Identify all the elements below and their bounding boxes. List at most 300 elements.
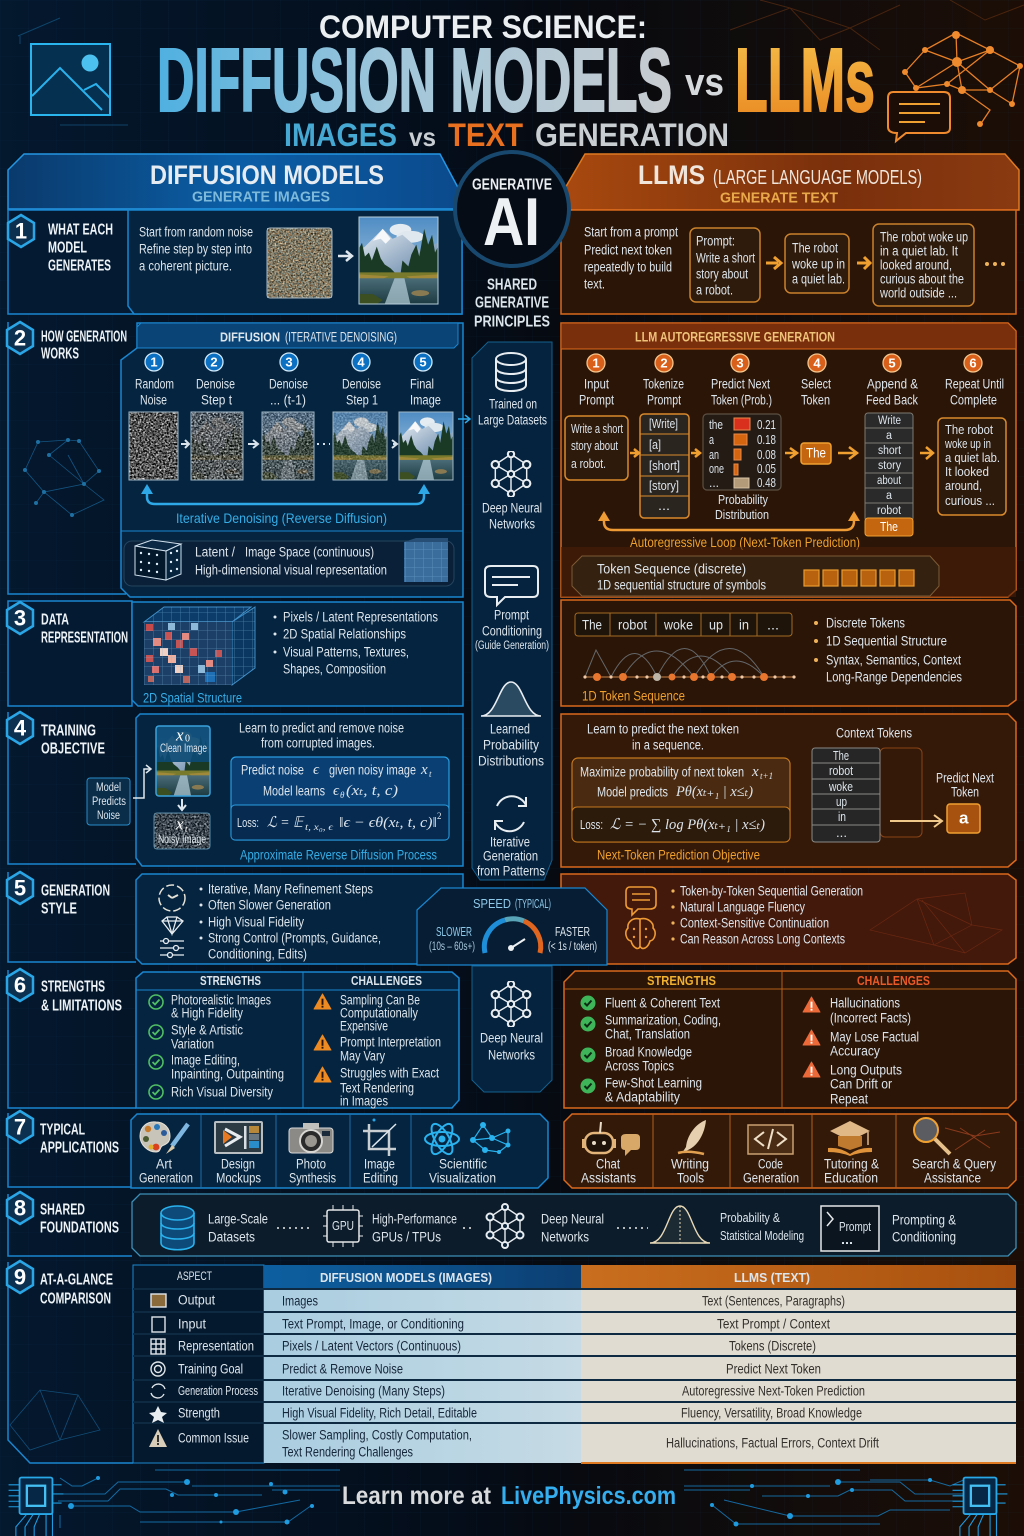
step labels: Denoise — [342, 376, 381, 392]
generative ai badge: GENERATIVE — [472, 176, 552, 194]
label — [41, 722, 105, 758]
label: WORKS — [41, 346, 79, 362]
diffusion header band: DIFFUSION — [220, 330, 280, 344]
principle: neural networks: Deep Neural — [482, 500, 542, 516]
context tokens stack: The — [833, 749, 849, 763]
description — [139, 224, 253, 274]
probability chart: ... — [709, 476, 719, 490]
foundation: gpu: GPUs / TPUs — [372, 1230, 441, 1244]
step labels: Repeat Until — [945, 376, 1004, 392]
app: writing tools — [671, 1120, 709, 1186]
heading: diffusion models: GENERATE IMAGES — [192, 188, 330, 206]
decorative network — [23, 438, 104, 517]
output box 1: woke up in — [791, 256, 845, 272]
token sequence panel — [561, 547, 1016, 597]
formula box: t+1 — [760, 771, 773, 781]
header: LLMS (TEXT) — [734, 1271, 810, 1285]
noisy image card: t — [185, 824, 188, 834]
dots — [985, 262, 1005, 266]
table header — [136, 972, 459, 1108]
output box 1 — [785, 234, 849, 293]
app: code generation — [743, 1125, 799, 1186]
probability chart: an — [709, 448, 719, 462]
appended token stack — [865, 413, 913, 536]
icon: prompt bubble — [485, 566, 538, 605]
icon: brain — [626, 919, 655, 948]
step labels: Image — [410, 392, 441, 408]
reverse diffusion arrow — [141, 484, 430, 504]
foundation: prompting: ... — [841, 1233, 853, 1247]
step labels: Final — [410, 376, 434, 392]
gauge — [484, 919, 541, 953]
bullets: High Visual Fidelity — [208, 914, 304, 930]
description: a coherent picture. — [139, 258, 232, 274]
label — [40, 1272, 113, 1308]
bullets — [200, 882, 381, 962]
step numbers — [587, 354, 982, 372]
latent text — [195, 544, 387, 578]
icon: cycle — [495, 796, 526, 831]
description: Predict next token — [584, 242, 672, 258]
decorative network — [10, 1390, 100, 1450]
challenges list — [803, 996, 919, 1106]
latent text: High-dimensional visual representation — [195, 562, 387, 578]
strengths list: Variation — [171, 1036, 214, 1052]
probability chart: a — [709, 433, 714, 447]
app: design mockups: Design — [221, 1156, 255, 1172]
table header: CHALLENGES — [351, 974, 422, 988]
bullets: Pixels / Latent Representations — [283, 610, 438, 624]
diffusion header band — [137, 323, 458, 348]
decorative network: top — [18, 0, 1024, 125]
bullets: 1D Sequential Structure — [826, 634, 947, 648]
token list: ... — [658, 499, 670, 513]
chart caption: Distribution — [715, 508, 769, 522]
right section 5: generation style — [561, 874, 1016, 964]
step labels: Prompt — [579, 392, 614, 408]
token row: woke — [663, 618, 693, 632]
app: design mockups: Mockups — [216, 1170, 261, 1186]
context tokens stack — [812, 748, 922, 842]
context tokens stack: robot — [829, 764, 853, 778]
table header: CHALLENGES — [857, 974, 930, 988]
icon: database — [496, 353, 526, 391]
strengths list — [580, 996, 721, 1104]
speed title: SPEED — [473, 897, 511, 911]
principle: datasets: Large Datasets — [478, 412, 547, 428]
app: scientific visualization: Visualization — [429, 1170, 496, 1186]
faster label — [548, 925, 597, 953]
step labels: Denoise — [269, 376, 308, 392]
step numbers: 4 — [357, 354, 365, 370]
strengths list: Chat, Translation — [605, 1026, 690, 1042]
label: Deep Neural — [480, 1030, 543, 1046]
badge 4 — [7, 712, 33, 744]
landscape image — [359, 217, 438, 304]
foundation: prompting: Prompting & — [892, 1212, 956, 1228]
principle: prompt conditioning: (Guide Generation) — [475, 640, 549, 652]
header: ASPECT — [177, 1271, 212, 1283]
app: photo synthesis: Synthesis — [289, 1170, 336, 1186]
label: HOW GENERATION — [41, 328, 127, 346]
center shared network panel — [472, 966, 552, 1092]
app: art generation: Art — [156, 1156, 172, 1172]
right section 1: prompt to text — [561, 210, 1016, 314]
left section 2: how generation works — [7, 322, 470, 597]
diffusion column: Slower Sampling, Costly Computation, — [282, 1428, 472, 1442]
foundation: neural networks: Deep Neural — [541, 1212, 604, 1226]
principle: iterative generation — [477, 834, 545, 878]
diffusion column: Images — [282, 1294, 318, 1308]
description — [239, 720, 404, 750]
label: STRENGTHS — [41, 978, 105, 996]
clean image card: 0 — [185, 734, 190, 744]
strengths list: Rich Visual Diversity — [171, 1084, 273, 1100]
diffusion column: Predict & Remove Noise — [282, 1362, 403, 1376]
foundation: probability — [650, 1206, 804, 1243]
heading: diffusion models — [8, 154, 462, 209]
foundation: prompting: Conditioning — [892, 1230, 956, 1244]
description — [587, 722, 739, 752]
flow arrows — [630, 447, 933, 459]
left section 4: training objective — [7, 712, 463, 866]
strengths list: Image Editing, — [171, 1052, 240, 1068]
badge 6 — [7, 969, 33, 1001]
model predicts noise — [87, 778, 130, 825]
aspect column: Training Goal — [178, 1362, 243, 1376]
appended token stack: a — [886, 430, 893, 442]
probability chart: the — [709, 418, 723, 432]
input prompt box — [565, 416, 628, 480]
heading: llms: GENERATE TEXT — [720, 190, 838, 206]
noise image — [267, 228, 332, 298]
formula box: ℒ = − ∑ log Pθ(xₜ₊₁ | x≤ₜ) — [610, 817, 765, 833]
predicted token: a — [959, 808, 969, 828]
challenges list: May Lose Factual — [830, 1030, 919, 1044]
right section 2: autoregressive generation — [561, 323, 1016, 597]
formula box: Maximize probability of next token — [580, 764, 744, 780]
app: scientific visualization — [425, 1121, 510, 1186]
step numbers: 1 — [592, 356, 600, 370]
heading: llms — [561, 154, 1019, 210]
badge 5: 5 — [14, 876, 26, 900]
app: tutoring and education: Education — [824, 1170, 878, 1186]
principle: prompt conditioning — [475, 608, 549, 652]
challenges list: Repeat — [830, 1092, 868, 1106]
app: photo synthesis — [289, 1123, 336, 1186]
output text box: curious ... — [945, 494, 995, 508]
model predicts noise: Noise — [97, 810, 120, 822]
principle: prompt conditioning: Prompt — [494, 608, 529, 622]
strengths list — [149, 992, 284, 1100]
app: image editing: Image — [364, 1156, 395, 1172]
step labels — [135, 376, 441, 408]
label: DATA — [41, 612, 69, 628]
bullets: 2D Spatial Relationships — [283, 626, 406, 642]
llm column: Predict Next Token — [726, 1362, 821, 1376]
header: DIFFUSION MODELS (IMAGES) — [320, 1271, 492, 1285]
label — [41, 328, 127, 362]
bullets: Can Reason Across Long Contexts — [680, 932, 845, 946]
principle: prompt conditioning: Conditioning — [482, 624, 542, 638]
llm column: Text (Sentences, Paragraphs) — [702, 1294, 845, 1308]
probability chart: 0.05 — [757, 462, 776, 476]
token row — [575, 613, 792, 636]
llm column — [666, 1294, 879, 1450]
badge 7 — [7, 1111, 33, 1143]
formula box: t — [429, 769, 432, 779]
formula box: Model learns — [263, 784, 325, 798]
left section 1: what each model generates — [8, 210, 462, 314]
description: Refine step by step into — [139, 242, 252, 256]
badge 5 — [7, 872, 33, 904]
challenges list: Computationally — [340, 1006, 418, 1020]
badge 3 — [7, 602, 33, 634]
output box 1: a quiet lab. — [792, 272, 845, 286]
input prompt box: a robot. — [571, 457, 606, 471]
predicted token — [947, 804, 980, 833]
header band: LLM AUTOREGRESSIVE GENERATION — [635, 330, 835, 344]
step numbers: 4 — [813, 356, 821, 370]
bullets — [814, 616, 962, 684]
label — [41, 882, 110, 918]
label — [480, 1030, 543, 1062]
label: TYPICAL — [40, 1122, 85, 1138]
header band — [561, 323, 1016, 349]
badge 7: 7 — [14, 1114, 26, 1140]
caption: 1D Token Sequence — [582, 688, 685, 704]
noisy image card: x — [175, 814, 184, 834]
formula box — [572, 758, 790, 842]
icon: distribution — [481, 682, 541, 716]
generative ai badge: AI — [483, 184, 540, 260]
description — [584, 224, 678, 292]
connector arrow — [458, 415, 470, 423]
step labels: Complete — [950, 392, 997, 408]
token list: [short] — [649, 459, 680, 473]
input prompt box: story about — [571, 439, 618, 453]
title: GENERATION — [535, 117, 729, 153]
formula box: ‖ϵ − ϵθ(xₜ, t, c)‖ — [339, 815, 437, 831]
badge 6: 6 — [14, 972, 26, 998]
footer circuit decoration — [58, 1470, 968, 1528]
icon: neural network right — [902, 31, 1023, 127]
arrow — [338, 251, 352, 261]
heading: llms: LLMS — [638, 160, 705, 190]
table header: STRENGTHS — [200, 974, 261, 988]
bullets: Context-Sensitive Continuation — [680, 916, 829, 930]
bullets: Visual Patterns, Textures, — [283, 644, 409, 660]
llm column: Fluency, Versatility, Broad Knowledge — [681, 1406, 862, 1420]
strengths list: & Adaptability — [605, 1090, 680, 1104]
badge 3: 3 — [14, 606, 26, 630]
speed title — [473, 897, 551, 911]
aspect column: Common Issue — [178, 1430, 249, 1446]
predict label: Token — [951, 784, 979, 800]
badge 1 — [8, 215, 34, 247]
foundation: datasets — [161, 1206, 268, 1250]
principle: probability — [478, 722, 544, 768]
challenges list: Can Drift or — [830, 1076, 892, 1092]
step numbers: 5 — [888, 356, 896, 370]
section 7 right: applications — [564, 1114, 1016, 1188]
cube right — [404, 538, 448, 582]
label: STYLE — [41, 900, 77, 918]
formula box: ϵ — [333, 783, 340, 799]
principle: probability: Learned — [490, 722, 530, 736]
icon: image frame — [31, 44, 110, 115]
badge 8: 8 — [14, 1196, 26, 1220]
principle: probability: Distributions — [478, 754, 544, 768]
badge 9 — [7, 1261, 33, 1293]
challenges list: Hallucinations — [830, 996, 900, 1010]
step labels: Input — [584, 376, 609, 392]
bullets: Syntax, Semantics, Context — [826, 652, 961, 668]
diffusion column: Text Rendering Challenges — [282, 1444, 413, 1460]
icon: chat — [626, 887, 656, 915]
arrow — [766, 257, 781, 269]
description: in a sequence. — [632, 738, 704, 752]
llm column: Text Prompt / Context — [717, 1316, 830, 1332]
bullets — [274, 610, 438, 676]
challenges list — [314, 992, 441, 1108]
generative ai badge — [455, 152, 569, 266]
formula box: ℒ = 𝔼 — [267, 815, 305, 831]
formula box: given noisy image — [329, 762, 416, 778]
center column panel — [472, 342, 552, 880]
probability chart: 0.21 — [757, 418, 776, 432]
formula box: Loss: — [237, 816, 259, 830]
title: TEXT — [448, 117, 523, 153]
step labels: Step t — [201, 392, 232, 408]
speed title: (TYPICAL) — [515, 897, 551, 911]
token sequence panel: 1D sequential structure of symbols — [597, 578, 766, 592]
foundation: gpu: GPU — [332, 1219, 354, 1233]
appended token stack: about — [877, 475, 902, 487]
shared principles heading — [474, 276, 550, 330]
clean image card: Clean Image — [160, 743, 207, 755]
decorative network — [870, 893, 1002, 953]
principle: datasets: Trained on — [489, 396, 537, 412]
diffusion header band: (ITERATIVE DENOISING) — [285, 330, 397, 344]
token squares — [804, 570, 914, 586]
slower label: (10s – 60s+) — [429, 941, 475, 953]
token list: [story] — [649, 479, 679, 493]
output text box: It looked — [945, 465, 989, 479]
strengths list: Fluent & Coherent Text — [605, 996, 720, 1010]
shared principles heading: GENERATIVE — [475, 294, 549, 312]
challenges list: in Images — [340, 1094, 388, 1108]
token row: robot — [618, 618, 647, 632]
strengths list: Photorealistic Images — [171, 992, 271, 1008]
prompt box: a robot. — [696, 282, 733, 298]
output box 2: curious about the — [880, 272, 964, 286]
principle: neural networks — [482, 500, 542, 532]
output box 2: in a quiet lab. It — [880, 244, 958, 258]
label — [40, 1122, 119, 1156]
output box 2: looked around, — [880, 258, 952, 272]
clean image card: x — [175, 726, 184, 744]
app: search and query: Assistance — [924, 1170, 981, 1186]
step numbers: 2 — [210, 354, 218, 370]
formula box: 2 — [437, 811, 442, 821]
slower label: SLOWER — [436, 925, 472, 939]
app: search and query — [912, 1118, 1000, 1186]
bullets — [671, 884, 863, 946]
formula box: ϵ — [313, 762, 320, 778]
challenges list: Accuracy — [830, 1044, 880, 1058]
appended token stack: robot — [877, 505, 902, 517]
section 8: shared foundations — [7, 1192, 1016, 1256]
title — [157, 9, 875, 153]
context tokens stack: ... — [836, 826, 847, 840]
selected token: The — [806, 446, 826, 460]
badge 2: 2 — [14, 326, 26, 350]
diffusion column: High Visual Fidelity, Rich Detail, Editable — [282, 1406, 477, 1420]
output box 2 — [873, 224, 974, 306]
principle: iterative generation: Generation — [483, 848, 538, 864]
strengths list: & High Fidelity — [171, 1006, 243, 1020]
slower label — [429, 925, 475, 953]
diffusion column: Iterative Denoising (Many Steps) — [282, 1384, 445, 1398]
formula box: (xₜ, t, c) — [346, 783, 398, 799]
prompt box: Write a short — [696, 250, 755, 266]
noisy image card: Noisy Image — [158, 834, 206, 846]
row icons — [149, 1294, 167, 1447]
step numbers: 3 — [736, 356, 744, 370]
step labels: Prompt — [647, 392, 681, 408]
footer link: LivePhysics.com — [501, 1482, 676, 1510]
icon: chip right — [953, 1477, 1007, 1536]
step numbers — [145, 353, 432, 371]
app: search and query: Search & Query — [912, 1156, 996, 1172]
icon: network — [492, 981, 530, 1027]
caption: Approximate Reverse Diffusion Process — [240, 848, 437, 862]
app: writing tools: Tools — [677, 1170, 704, 1186]
arrow down — [178, 799, 186, 810]
foundation: gpu: High-Performance — [372, 1212, 457, 1226]
app: chat assistants: Chat — [596, 1156, 620, 1172]
cube left — [135, 540, 181, 580]
bullets: Strong Control (Prompts, Guidance, — [208, 930, 381, 946]
label: GENERATION — [41, 882, 110, 900]
formula box: x — [420, 762, 428, 778]
app: code generation: Code — [758, 1156, 783, 1172]
llm column: Hallucinations, Factual Errors, Context Drift — [666, 1436, 879, 1450]
foundation: probability: Probability & — [720, 1211, 781, 1225]
icon: network — [492, 451, 530, 497]
step labels: Random — [135, 376, 174, 392]
step labels: Noise — [140, 392, 167, 408]
appended token stack: The — [880, 520, 898, 534]
probability chart: 0.08 — [757, 448, 776, 462]
app: photo synthesis: Photo — [296, 1156, 326, 1172]
challenges list: Expensive — [340, 1018, 388, 1034]
label — [41, 612, 128, 646]
output text box — [938, 418, 1006, 515]
output box 1: The robot — [792, 240, 838, 256]
strengths list: Few-Shot Learning — [605, 1076, 702, 1090]
context tokens stack: woke — [828, 780, 853, 794]
label: AT-A-GLANCE — [40, 1272, 113, 1288]
foundation: neural networks: Networks — [541, 1230, 589, 1244]
principle: probability: Probability — [483, 738, 539, 752]
diffusion column — [282, 1294, 477, 1460]
bullets: Long-Range Dependencies — [826, 670, 962, 684]
token row: ... — [767, 618, 779, 632]
icon: sliders — [160, 938, 184, 958]
bullets: Shapes, Composition — [283, 662, 386, 676]
